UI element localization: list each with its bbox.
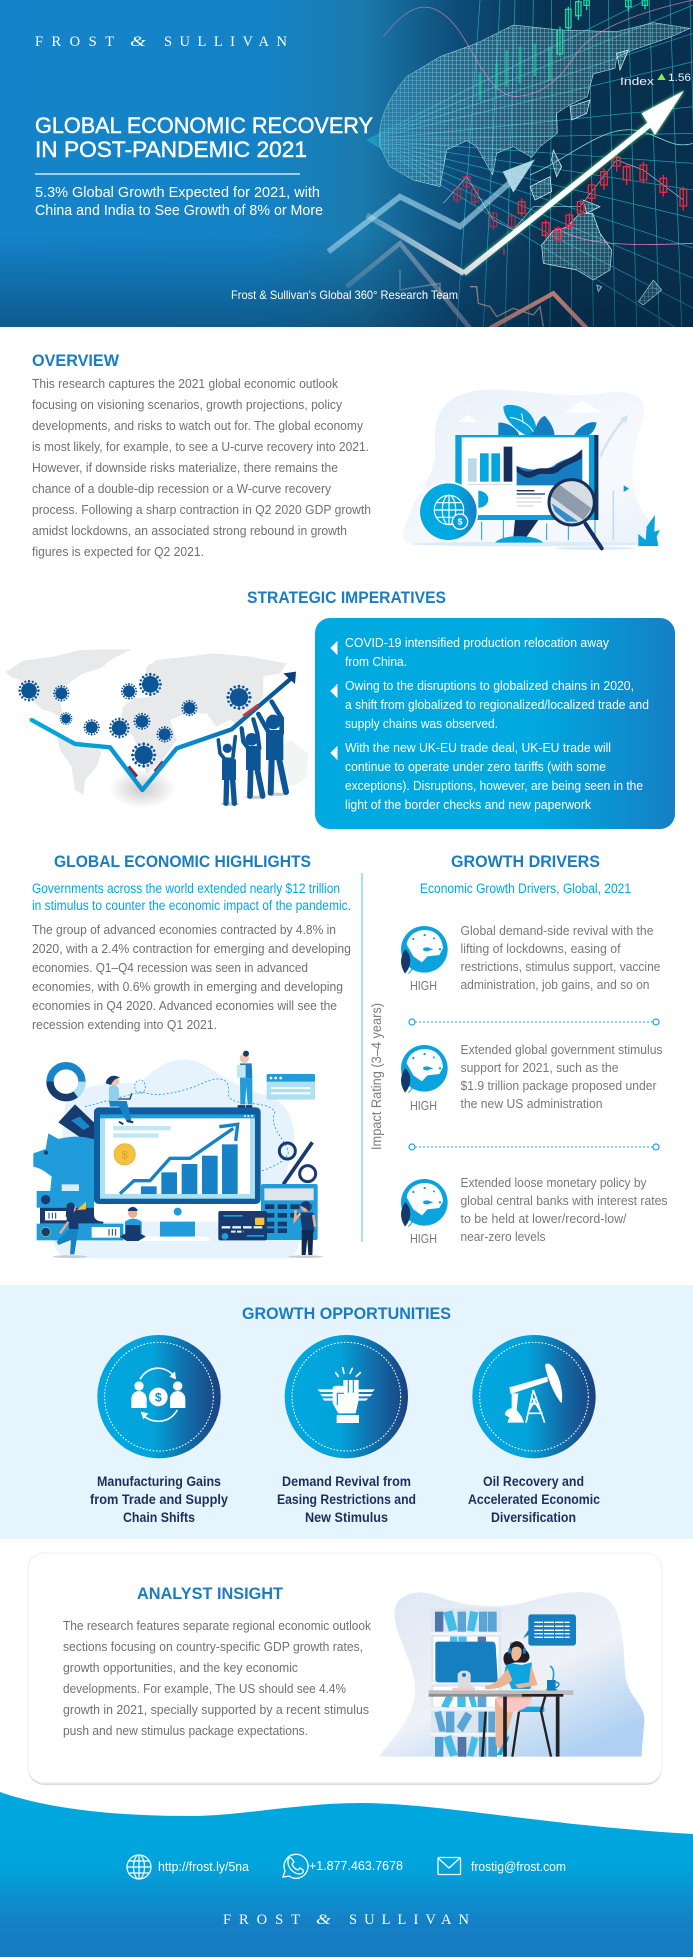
analyst insight card (28, 1553, 662, 1785)
bullet three: continue to operate under zero tariffs (with some (345, 759, 606, 774)
driver three (401, 1176, 668, 1246)
woman (485, 1641, 538, 1755)
driver one: lifting of lockdowns, easing of (460, 942, 621, 956)
driver two: support for 2021, such as the (460, 1061, 619, 1075)
world map with recovery curve illustration (6, 649, 308, 808)
growth opportunities heading: GROWTH OPPORTUNITIES (242, 1305, 451, 1323)
logo (35, 34, 288, 50)
overview illustration: monitor with charts and magnifier: $ (458, 517, 463, 527)
analyst illustration: woman at desk with headset (379, 1592, 644, 1757)
analyst insight text: The research features separate regional economic outlook (63, 1618, 371, 1633)
grid (367, 0, 693, 338)
driver three: global central banks with interest rates (460, 1194, 668, 1208)
opportunity: manufacturing gains: from Trade and Supply (90, 1492, 228, 1507)
footer logo: & (316, 1912, 332, 1928)
overview text: This research captures the 2021 global economic outlook (32, 376, 338, 391)
big glowing arrow (367, 73, 684, 273)
skyline chart (470, 287, 543, 327)
bullet one (331, 635, 609, 669)
impact rating axis label: Impact Rating (3–4 years) (369, 1003, 384, 1150)
analyst insight text (63, 1618, 371, 1738)
driver two: $1.9 trillion package proposed under (460, 1079, 656, 1093)
driver two: HIGH (410, 1099, 437, 1113)
recovery trend line (32, 679, 290, 790)
title: GLOBAL ECONOMIC RECOVERY (35, 113, 373, 138)
opportunity: demand revival: New Stimulus (305, 1510, 388, 1525)
footer (0, 1792, 693, 1957)
man standing (295, 1201, 315, 1255)
analyst insight text: push and new stimulus package expectations. (63, 1723, 308, 1738)
overview text: figures is expected for Q2 2021. (32, 544, 204, 559)
footer logo: SULLIVAN (349, 1912, 470, 1928)
driver one (401, 924, 661, 993)
bullet one: from China. (345, 654, 407, 669)
strategic imperatives section (6, 589, 675, 829)
binders (37, 1191, 100, 1208)
icon: envelope (438, 1858, 460, 1874)
monitor (94, 1202, 261, 1222)
bookshelf (431, 1608, 501, 1757)
overview text: amidst lockdowns, an associated strong rebound in growth (32, 523, 347, 538)
highlights callout: in stimulus to counter the economic impact of the pandemic. (32, 898, 351, 913)
analyst insight text: growth in 2021, specially supported by a recent stimulus (63, 1702, 369, 1717)
chair (534, 1666, 553, 1690)
logo: SULLIVAN (164, 34, 288, 50)
opportunity: oil recovery: Accelerated Economic (468, 1492, 600, 1507)
title: IN POST-PANDEMIC 2021 (35, 137, 307, 162)
woman with megaphone (57, 1202, 86, 1254)
icon: people exchanging money: $ (155, 1390, 162, 1404)
opportunity: manufacturing gains (90, 1335, 228, 1525)
analyst insight heading: ANALYST INSIGHT (137, 1585, 283, 1603)
calculator (261, 1184, 318, 1240)
icon: raised fist with wings (285, 1335, 408, 1458)
candles (454, 155, 687, 255)
opportunity: oil recovery: Oil Recovery and (483, 1474, 584, 1489)
overview heading: OVERVIEW (32, 352, 119, 370)
contact: phone: +1.877.463.7678 (309, 1859, 403, 1873)
sitting person with laptop (106, 1076, 133, 1124)
contact: website (127, 1855, 249, 1879)
strategic imperatives heading: STRATEGIC IMPERATIVES (247, 589, 446, 607)
icon: oil pump jack (472, 1335, 596, 1458)
curves (383, 0, 693, 97)
highlights text: economies in Q4 2020. Advanced economies will see the (32, 998, 337, 1013)
overview text (32, 376, 371, 559)
growth drivers subheading: Economic Growth Drivers, Global, 2021 (420, 881, 631, 896)
header background artwork: world map and market chart (347, 0, 693, 338)
highlights heading: GLOBAL ECONOMIC HIGHLIGHTS (54, 853, 311, 871)
bullet two: a shift from globalized to regionalized/localized trade and (345, 697, 649, 712)
driver two: Extended global government stimulus (460, 1043, 662, 1057)
analyst insight text: growth opportunities, and the key economic (63, 1660, 298, 1675)
driver one: HIGH (410, 979, 437, 993)
growth opportunities section (0, 1285, 693, 1539)
browser window (267, 1074, 315, 1100)
contact: phone (283, 1854, 403, 1878)
footer logo (223, 1912, 470, 1928)
overview section (32, 352, 660, 559)
bullet three: light of the border checks and new paperwork (345, 797, 591, 812)
gauge icon (401, 926, 448, 974)
overview illustration: monitor with charts and magnifier (403, 389, 660, 550)
standing person with tablet (237, 1051, 252, 1106)
opportunity: oil recovery (468, 1335, 600, 1525)
overview text: developments, and risks to watch out for. The global economy (32, 418, 363, 433)
speech bubble (523, 1614, 576, 1646)
driver two: the new US administration (460, 1097, 603, 1111)
vertical section divider (362, 873, 363, 1242)
highlights illustration: growth chart on monitor with people: $ (122, 1149, 129, 1161)
opportunity: manufacturing gains: Manufacturing Gains (97, 1474, 221, 1489)
highlights callout (32, 881, 351, 913)
contact: email (438, 1858, 566, 1874)
driver three: to be held at lower/record-low/ (460, 1212, 627, 1226)
contact: website: http://frost.ly/5na (158, 1860, 249, 1874)
logo: & (130, 34, 147, 50)
strategic imperatives panel (315, 618, 675, 829)
virus markers (18, 673, 252, 768)
opportunity: demand revival (277, 1335, 416, 1525)
title (35, 113, 373, 162)
computer monitor (435, 1642, 498, 1682)
bullet three: exceptions). Disruptions, however, are being seen in the (345, 778, 643, 793)
card in piggy bank (58, 1104, 97, 1142)
index readout: Index (620, 76, 655, 88)
driver two (401, 1043, 662, 1113)
continents (379, 23, 690, 187)
gauge icon (401, 1045, 448, 1093)
contact: email: frostig@frost.com (471, 1860, 566, 1874)
piggy bank (33, 1133, 105, 1193)
bullet two (331, 678, 649, 731)
subtitle: 5.3% Global Growth Expected for 2021, with (35, 184, 320, 201)
driver one: administration, job gains, and so on (460, 978, 650, 992)
driver three: Extended loose monetary policy by (460, 1176, 647, 1190)
icon: people exchanging money (97, 1335, 221, 1458)
opportunity: demand revival: Demand Revival from (282, 1474, 411, 1489)
gauge icon (401, 1179, 448, 1227)
overview text: focusing on visioning scenarios, growth projections, policy (32, 397, 342, 412)
overview text: process. Following a sharp contraction in Q2 2020 GDP growth (32, 502, 371, 517)
percent symbol (279, 1142, 316, 1184)
highlights illustration: growth chart on monitor with people (33, 1051, 323, 1258)
analyst insight text: developments. For example, The US should see 4.4% (63, 1681, 346, 1696)
driver one: restrictions, stimulus support, vaccine (460, 960, 661, 974)
analyst insight text: sections focusing on country-specific GDP growth rates, (63, 1639, 363, 1654)
index readout: 1.56 (668, 72, 691, 84)
light blue arrow (328, 159, 535, 252)
pink trend (347, 243, 470, 328)
driver one: Global demand-side revival with the (460, 924, 654, 938)
bullet one: COVID-19 intensified production relocation away (345, 635, 609, 650)
subtitle (35, 184, 323, 219)
opportunity: demand revival: Easing Restrictions and (277, 1492, 416, 1507)
overview text: However, if downside risks materialize, there remains the (32, 460, 338, 475)
donut chart (50, 1066, 82, 1098)
opportunity: manufacturing gains: Chain Shifts (123, 1510, 195, 1525)
research team credit: Frost & Sullivan's Global 360° Research Team (231, 288, 458, 302)
icon: globe (127, 1855, 151, 1879)
mug (547, 1680, 556, 1689)
index readout (620, 72, 691, 88)
logo: FROST (35, 34, 114, 50)
overview text: chance of a double-dip recession or a W-curve recovery (32, 481, 331, 496)
bullet three: With the new UK-EU trade deal, UK-EU trade will (345, 740, 611, 755)
driver three: near-zero levels (460, 1230, 546, 1244)
bullet two: supply chains was observed. (345, 716, 498, 731)
highlights text: The group of advanced economies contracted by 4.8% in (32, 922, 336, 937)
overview text: is most likely, for example, to see a U-curve recovery into 2021. (32, 439, 369, 454)
highlights text: 2020, with a 2.4% contraction for emerging and developing (32, 941, 351, 956)
driver three: HIGH (410, 1232, 437, 1246)
footer logo: FROST (223, 1912, 300, 1928)
highlights callout: Governments across the world extended nearly $12 trillion (32, 881, 340, 896)
credit card (218, 1211, 267, 1240)
header banner (0, 0, 693, 338)
bullet two: Owing to the disruptions to globalized chains in 2020, (345, 678, 634, 693)
desk (429, 1690, 573, 1757)
global economic highlights section (32, 853, 351, 1258)
highlights text: economies. Q1–Q4 recession was seen in advanced (32, 960, 308, 975)
people lifting the curve (218, 702, 286, 803)
subtitle: China and India to See Growth of 8% or More (35, 202, 323, 219)
bullet three (331, 740, 643, 812)
highlights text (32, 922, 351, 1032)
man with laptop (120, 1207, 146, 1241)
highlights text: economies, with 0.6% growth in emerging and developing (32, 979, 343, 994)
opportunity: oil recovery: Diversification (491, 1510, 576, 1525)
highlights text: recession extending into Q1 2021. (32, 1017, 217, 1032)
icon: phone bubble (283, 1854, 308, 1878)
growth drivers heading: GROWTH DRIVERS (451, 853, 600, 871)
growth drivers section (369, 853, 668, 1246)
